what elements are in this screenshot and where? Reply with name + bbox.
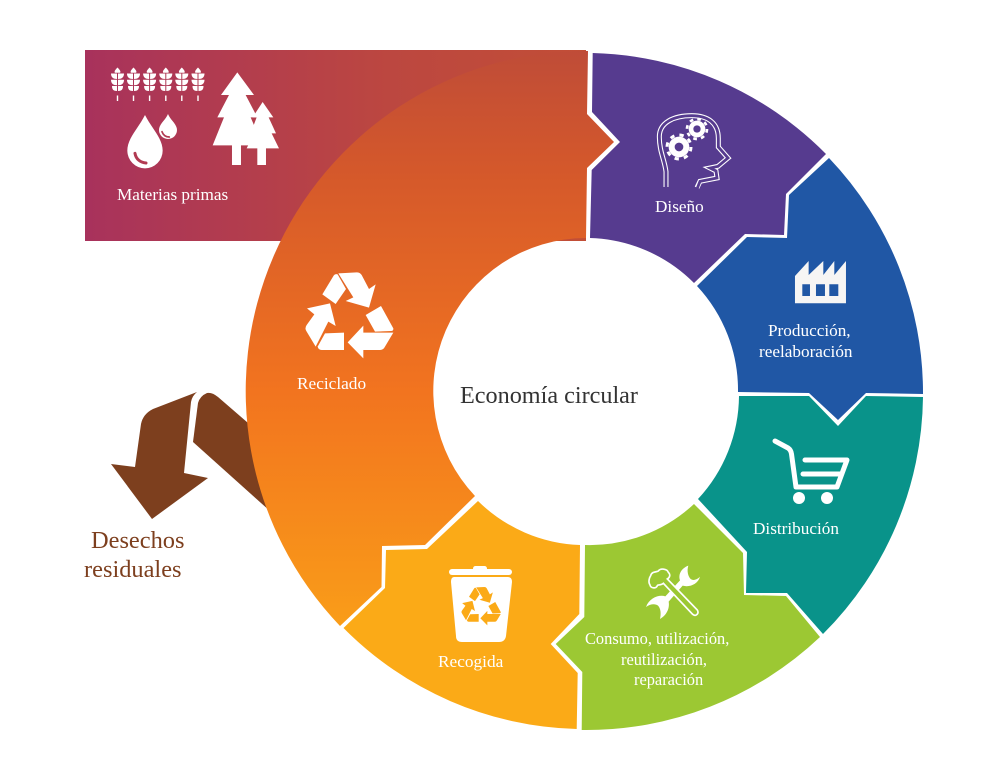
segment: recogida <box>344 501 580 729</box>
label: distribución: Distribución <box>753 519 839 538</box>
label: reciclado: Reciclado <box>297 374 366 393</box>
arrow: desechos residuales <box>111 392 280 520</box>
segment: distribución <box>698 396 923 634</box>
icon: hammer and wrench <box>646 566 700 619</box>
label: consumo, utilización, reutilización, reparación: Consumo, utilización, <box>585 629 729 648</box>
icon: recycle <box>305 272 393 358</box>
icon: wheat row <box>111 68 204 101</box>
label: materias primas: Materias primas <box>117 185 229 204</box>
icon: pine trees <box>213 72 279 165</box>
label: recogida: Recogida <box>438 652 504 671</box>
segment: diseño <box>590 53 826 283</box>
icon: shopping cart <box>775 441 847 504</box>
segment: reciclado <box>246 51 614 626</box>
icon: head with gears <box>659 116 728 189</box>
label: consumo, utilización, reutilización, reparación: reparación <box>634 670 703 689</box>
label: diseño: Diseño <box>655 197 704 216</box>
label: desechos residuales: Desechos <box>91 527 184 554</box>
label: desechos residuales: residuales <box>84 556 182 583</box>
title: Economía circular <box>460 382 638 409</box>
label: producción, reelaboración: reelaboración <box>759 342 853 361</box>
icon: factory <box>795 261 846 303</box>
segment: consumo <box>556 504 820 730</box>
label: consumo, utilización, reutilización, reparación: reutilización, <box>621 650 707 669</box>
panel: materias primas <box>85 50 586 241</box>
label: producción, reelaboración: Producción, <box>768 321 851 340</box>
icon: water drops <box>127 114 177 168</box>
icon: recycling bin <box>449 566 512 642</box>
segment: producción <box>697 158 923 420</box>
